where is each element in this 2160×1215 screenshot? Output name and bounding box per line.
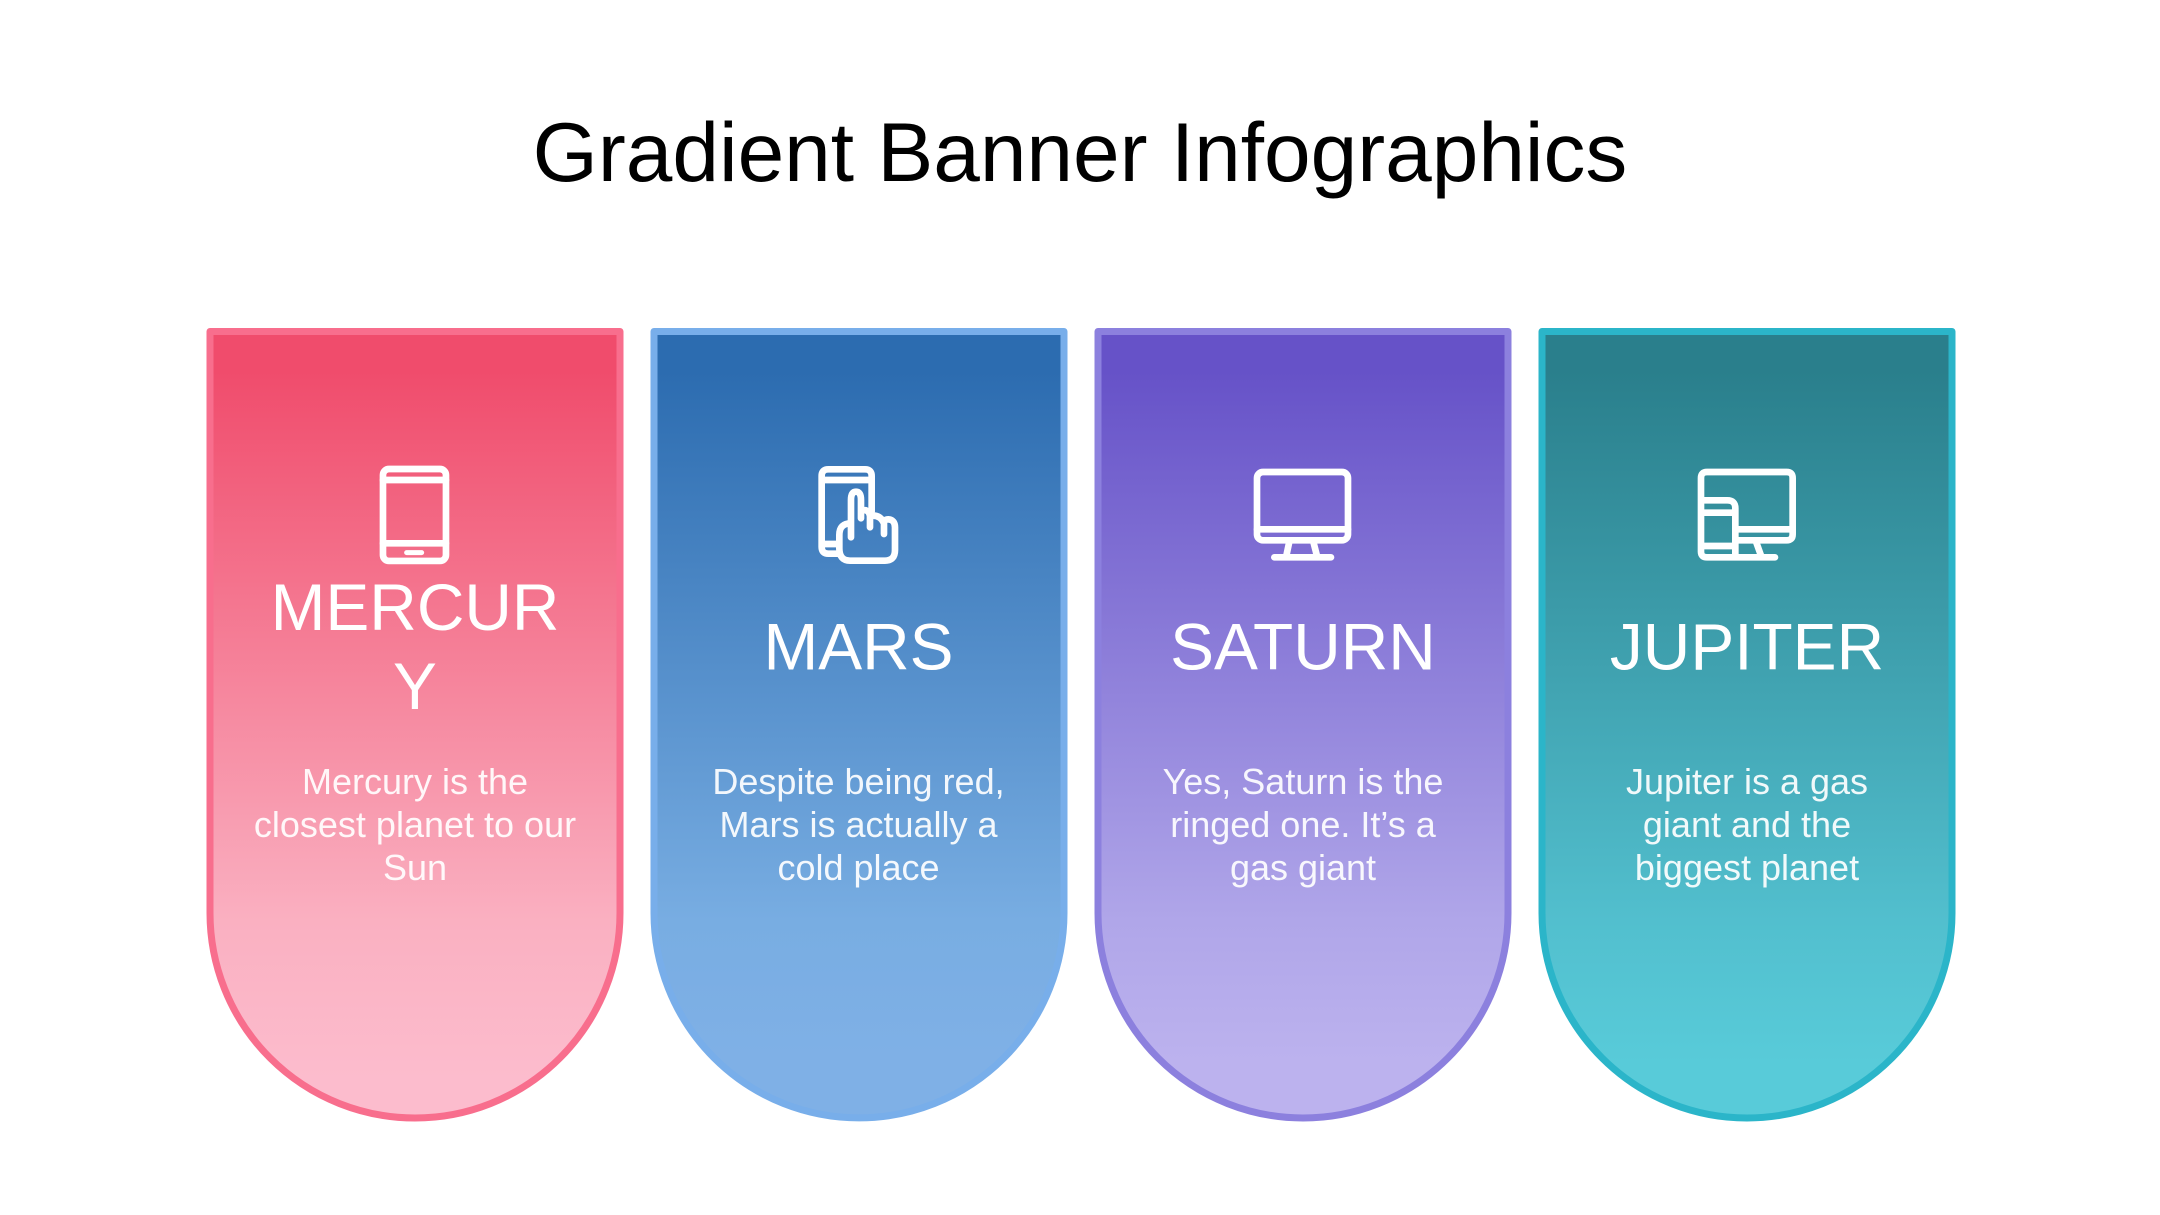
banner shape: saturn: [1098, 332, 1508, 1118]
banner shape: jupiter: [1542, 332, 1952, 1118]
panel: mercury: [210, 332, 620, 1118]
description: mercury: closest planet to our: [254, 804, 576, 845]
heading: mars: MARS: [763, 610, 954, 684]
heading: saturn: SATURN: [1170, 610, 1436, 684]
banner shape: mercury: [210, 332, 620, 1118]
description: mars: Mars is actually a: [719, 804, 999, 845]
description: mars: Despite being red,: [712, 761, 1005, 802]
panel: saturn: [1098, 332, 1508, 1118]
description: saturn: gas giant: [1230, 847, 1376, 888]
description: jupiter: giant and the: [1643, 804, 1851, 845]
icon: monitor and phone: [1701, 472, 1793, 557]
description: saturn: Yes, Saturn is the: [1163, 761, 1443, 802]
description: saturn: ringed one. It’s a: [1170, 804, 1437, 845]
panel: jupiter: [1542, 332, 1952, 1118]
panel: mars: [654, 332, 1064, 1118]
heading: mercury: Y: [393, 649, 437, 723]
icon: tablet: [383, 469, 446, 561]
description: jupiter: Jupiter is a gas: [1626, 761, 1868, 802]
icon: desktop monitor: [1257, 472, 1348, 557]
description: jupiter: biggest planet: [1635, 847, 1859, 888]
icon: phone with tapping hand: [822, 469, 895, 561]
heading: jupiter: JUPITER: [1610, 610, 1884, 684]
title: Gradient Banner Infographics: [533, 105, 1627, 199]
description: mars: cold place: [777, 847, 940, 888]
description: mercury: Sun: [383, 847, 447, 888]
description: mercury: Mercury is the: [302, 761, 528, 802]
heading: mercury: MERCUR: [271, 570, 559, 644]
banner shape: mars: [654, 332, 1064, 1118]
